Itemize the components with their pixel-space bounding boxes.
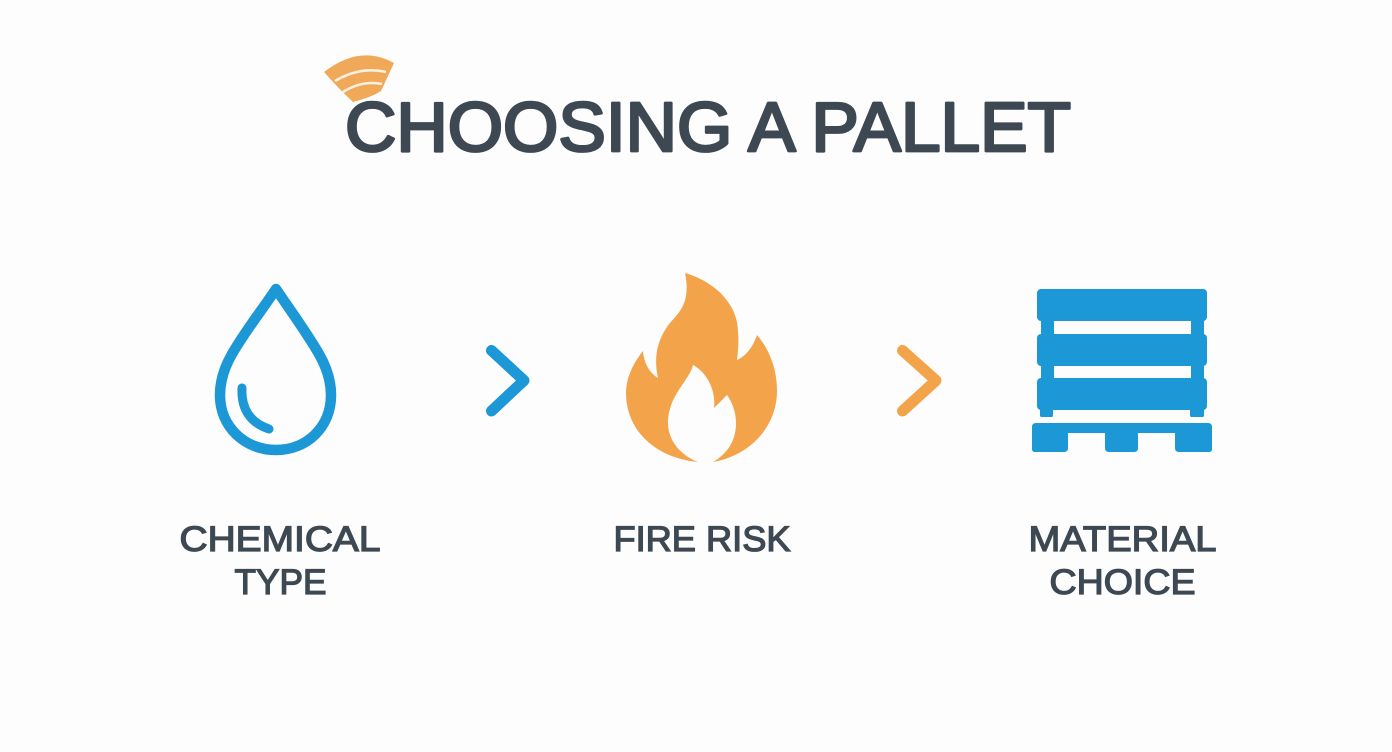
icon: flame	[626, 273, 777, 462]
arrow: orange chevron	[902, 350, 936, 411]
label: material choice: CHOICE	[1050, 562, 1196, 602]
label: chemical type: CHEMICAL	[180, 519, 380, 559]
label: chemical type: TYPE	[234, 562, 326, 602]
label: chemical type	[180, 519, 380, 602]
label: fire risk: FIRE RISK	[614, 519, 791, 559]
arrow: blue chevron	[492, 350, 524, 411]
title: CHOOSING A PALLET	[345, 88, 1071, 166]
icon: pallet	[1032, 289, 1212, 452]
label: material choice: MATERIAL	[1028, 519, 1216, 559]
icon: water drop	[220, 289, 331, 450]
label: material choice	[1028, 519, 1216, 602]
title icon: orange signal fan	[324, 55, 394, 102]
